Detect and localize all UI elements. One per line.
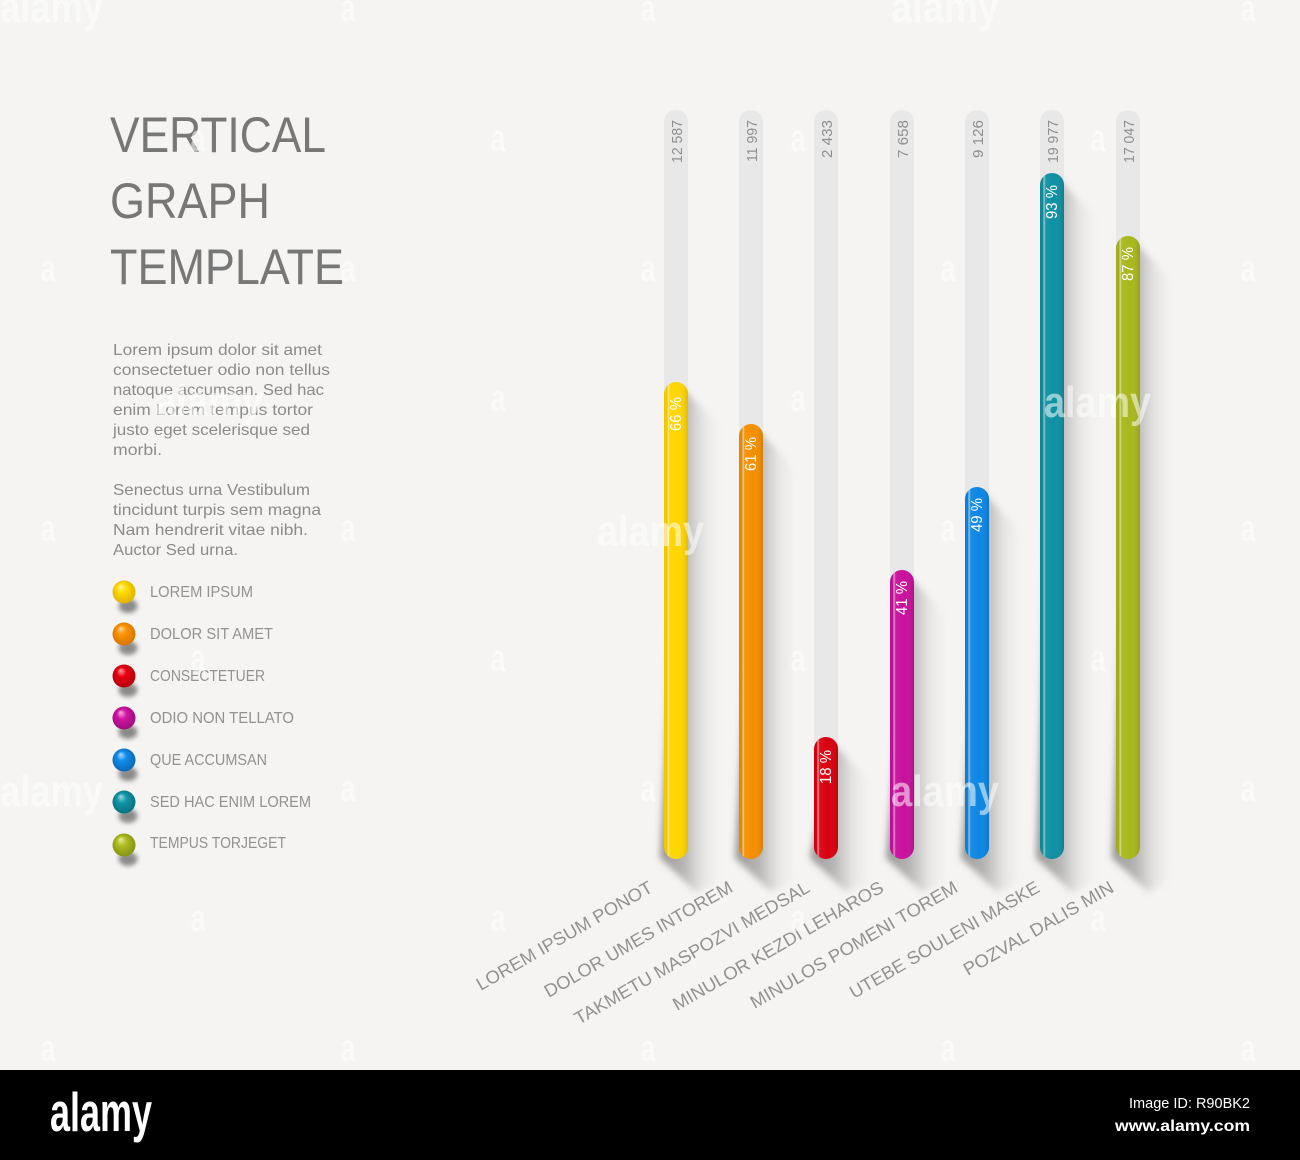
column 1: yellow 66% [660, 110, 720, 892]
legend item: blue [112, 748, 267, 781]
footer logo: alamy [50, 1081, 152, 1143]
watermark pattern: a [490, 898, 506, 940]
watermark pattern: a [790, 898, 806, 940]
watermark pattern: a [640, 768, 656, 810]
column 1: yellow 66%: 12 587 [669, 120, 686, 163]
legend item: blue: QUE ACCUMSAN [150, 752, 267, 769]
second paragraph: Auctor Sed urna. [113, 542, 238, 559]
column 7: olive 87%: 87 % [1120, 247, 1137, 281]
intro paragraph: natoque accumsan. Sed hac [113, 382, 324, 399]
column 1: yellow 66%: 66 % [668, 397, 685, 431]
column 4: magenta 41%: 7 658 [895, 120, 912, 158]
legend item: red: CONSECTETUER [150, 668, 265, 685]
intro paragraph: justo eget scelerisque sed [112, 422, 310, 439]
axis labels: UTEBE SOULENI MASKE [846, 877, 1043, 1002]
title [110, 107, 344, 295]
axis labels: POZVAL DALIS MIN [960, 877, 1117, 979]
intro paragraph: Lorem ipsum dolor sit amet [113, 342, 323, 359]
watermark pattern: a [40, 1028, 56, 1070]
column 6: teal 93%: 93 % [1044, 185, 1061, 219]
watermark pattern: a [490, 118, 506, 160]
title: VERTICAL [110, 107, 326, 163]
axis labels: LOREM IPSUM PONOT [473, 877, 656, 994]
legend item: yellow [112, 580, 253, 613]
watermark pattern: alamy [1044, 378, 1151, 427]
watermark pattern: a [490, 638, 506, 680]
second paragraph: Senectus urna Vestibulum [113, 482, 310, 499]
watermark pattern: a [190, 118, 206, 160]
axis labels: MINULOS POMENI TOREM [747, 877, 961, 1012]
watermark pattern: a [790, 638, 806, 680]
watermark pattern: a [1090, 638, 1106, 680]
legend [112, 580, 311, 866]
legend item: olive: TEMPUS TORJEGET [150, 835, 286, 852]
column 7: olive 87% [1112, 110, 1172, 892]
watermark pattern: a [190, 898, 206, 940]
intro paragraph: morbi. [113, 442, 162, 459]
column 5: blue 49% [961, 110, 1021, 892]
watermark pattern: a [490, 378, 506, 420]
column 2: orange 61%: 61 % [743, 437, 760, 471]
watermark pattern: a [340, 248, 356, 290]
watermark pattern: a [940, 248, 956, 290]
legend item: yellow: LOREM IPSUM [150, 584, 253, 601]
watermark pattern: a [1090, 898, 1106, 940]
footer bar [0, 1070, 1300, 1160]
column 2: orange 61%: 11 997 [744, 120, 761, 162]
watermark pattern: a [40, 508, 56, 550]
footer url: www.alamy.com [1114, 1118, 1250, 1135]
axis labels [473, 877, 1117, 1028]
watermark pattern: alamy [0, 767, 103, 816]
title: GRAPH [110, 173, 270, 229]
legend item: magenta: ODIO NON TELLATO [150, 710, 294, 727]
column 5: blue 49%: 9 126 [970, 120, 987, 158]
legend item: orange: DOLOR SIT AMET [150, 626, 273, 643]
column 6: teal 93%: 19 977 [1045, 120, 1062, 163]
intro paragraph: enim Lorem tempus tortor [113, 402, 314, 419]
axis labels: TAKMETU MASPOZVI MEDSAL [571, 877, 813, 1028]
intro paragraph [112, 342, 330, 459]
watermark pattern: a [940, 1028, 956, 1070]
title: TEMPLATE [110, 239, 344, 295]
watermark pattern: a [940, 508, 956, 550]
watermark pattern: alamy [891, 767, 999, 816]
axis labels: DOLOR UMES INTOREM [541, 877, 736, 1001]
second paragraph: tincidunt turpis sem magna [113, 502, 321, 519]
column 4: magenta 41% [886, 110, 946, 892]
footer image id: Image ID: R90BK2 [1129, 1095, 1250, 1112]
watermark pattern: a [1090, 118, 1106, 160]
watermark pattern: a [640, 1028, 656, 1070]
watermark pattern: a [640, 248, 656, 290]
watermark pattern: a [1240, 508, 1256, 550]
column 4: magenta 41%: 41 % [894, 581, 911, 615]
axis labels: MINULOR KEZDI LEHAROS [669, 877, 887, 1014]
column 3: red 18%: 2 433 [819, 120, 836, 158]
column 6: teal 93% [1036, 110, 1096, 892]
legend item: magenta [112, 706, 294, 739]
legend item: teal [112, 790, 311, 823]
column 3: red 18% [810, 110, 870, 892]
second paragraph [113, 482, 321, 559]
watermark pattern: a [1240, 768, 1256, 810]
legend item: olive [112, 834, 286, 866]
watermark pattern: alamy [155, 377, 263, 426]
column 5: blue 49%: 49 % [969, 498, 986, 532]
watermark pattern: a [340, 768, 356, 810]
column 2: orange 61% [735, 110, 795, 892]
column 3: red 18%: 18 % [818, 750, 835, 784]
bar chart [660, 110, 1172, 892]
second paragraph: Nam hendrerit vitae nibh. [113, 522, 308, 539]
watermark pattern: a [340, 508, 356, 550]
watermark pattern: a [790, 118, 806, 160]
watermark pattern: a [340, 1028, 356, 1070]
column 7: olive 87%: 17 047 [1121, 120, 1138, 163]
watermark pattern: alamy [597, 507, 704, 556]
legend item: orange [112, 622, 273, 655]
legend item: red [112, 664, 265, 697]
watermark pattern: a [790, 378, 806, 420]
watermark pattern: a [1240, 1028, 1256, 1070]
watermark pattern: a [1240, 248, 1256, 290]
watermark pattern: a [190, 638, 206, 680]
intro paragraph: consectetuer odio non tellus [113, 362, 330, 379]
watermark pattern: a [40, 248, 56, 290]
legend item: teal: SED HAC ENIM LOREM [150, 794, 311, 811]
